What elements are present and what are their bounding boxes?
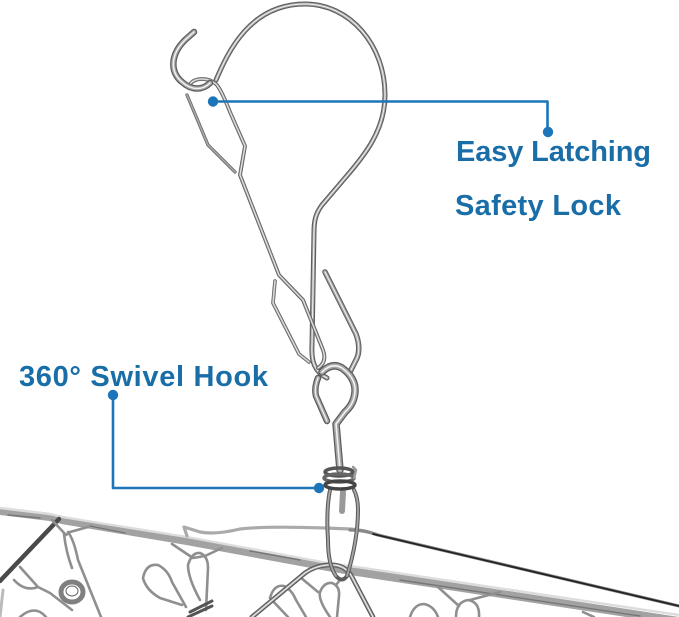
lower latch left arm <box>273 281 309 362</box>
callout: swivel hook connector <box>108 390 324 493</box>
lower latch right arm <box>325 272 359 372</box>
peg: centre <box>270 577 340 617</box>
clothes pegs <box>0 520 594 617</box>
label: 360 swivel hook: 360° Swivel Hook <box>19 361 269 393</box>
peg: left <box>0 520 101 617</box>
top hook tip <box>173 32 210 88</box>
swivel hook shaft <box>322 366 355 470</box>
swivel eye loop <box>327 490 358 580</box>
swivel coil <box>324 467 356 511</box>
rack frame <box>0 508 679 617</box>
label: safety lock: Safety Lock <box>455 190 622 222</box>
small bottom hook end <box>315 378 327 421</box>
big hook wire <box>216 4 385 378</box>
peg: middle <box>143 544 222 617</box>
callout: easy latching connector <box>208 96 553 137</box>
frame thin wire <box>184 527 679 606</box>
peg: right <box>410 587 594 617</box>
label: easy latching: Easy Latching <box>456 136 651 168</box>
hook shank with safety latch <box>190 79 324 368</box>
upper latch left arm <box>187 95 235 172</box>
rack hanger arch <box>252 565 373 617</box>
frame top bar <box>0 508 679 617</box>
frame diagonal bar <box>0 519 59 581</box>
